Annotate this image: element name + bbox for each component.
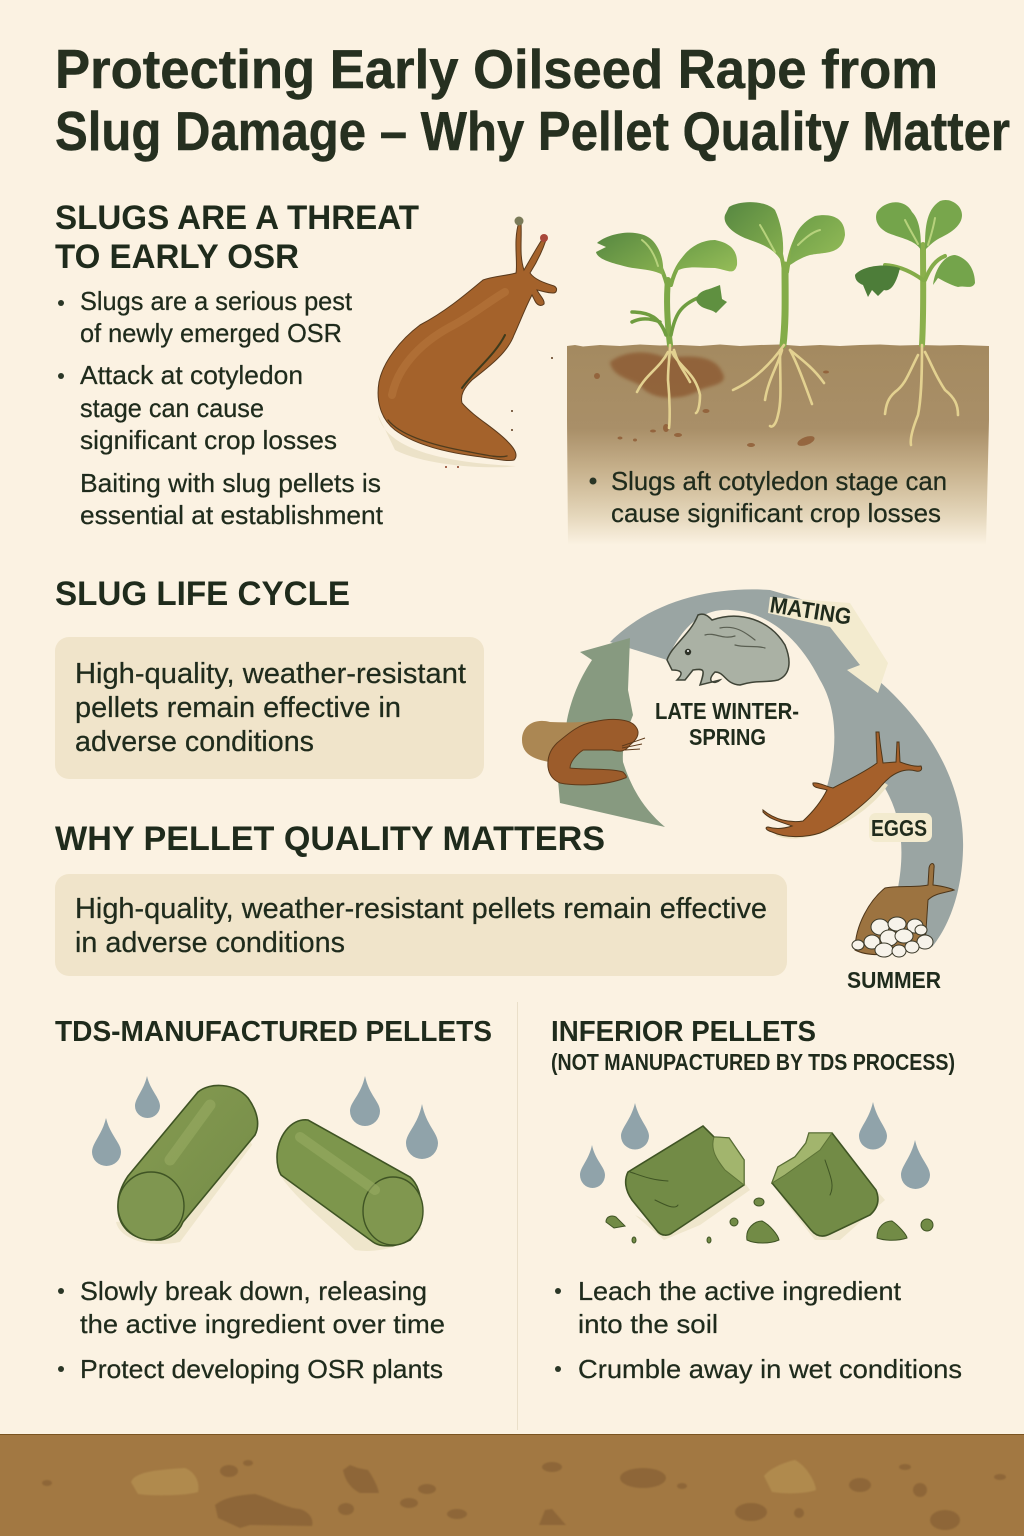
panel: slug life cycle bbox=[55, 575, 963, 993]
label: eggs: EGGS bbox=[871, 815, 927, 841]
callout: life cycle note: High-quality, weather-resistant bbox=[75, 658, 466, 690]
callout: life cycle note bbox=[55, 637, 484, 779]
label: summer: SUMMER bbox=[847, 967, 941, 993]
label: mating: MATING bbox=[768, 591, 853, 630]
bullet list: TDS benefits: the active ingredient over time bbox=[80, 1309, 445, 1339]
arrow: cream mating arrow bbox=[768, 597, 888, 693]
label: late winter-spring: LATE WINTER- bbox=[655, 698, 799, 724]
soil band bbox=[0, 1434, 1024, 1536]
icon: intact pellets bbox=[116, 1085, 423, 1251]
damaged soil patch bbox=[610, 352, 724, 398]
heading: slugs are a threat: TO EARLY OSR bbox=[55, 238, 299, 276]
panel: inferior pellets bbox=[551, 1016, 962, 1384]
bullet list: inferior drawbacks: Crumble away in wet conditions bbox=[578, 1354, 962, 1384]
bullet list: TDS benefits: Protect developing OSR plants bbox=[80, 1354, 443, 1384]
heading: inferior pellets: INFERIOR PELLETS bbox=[551, 1016, 816, 1048]
bullet list: TDS benefits: Slowly break down, releasing bbox=[80, 1276, 427, 1306]
icon: crumbling pellets bbox=[606, 1126, 933, 1243]
arrow: grey cycle arc bbox=[610, 589, 963, 947]
text block: soil caption: Slugs aft cotyledon stage can bbox=[611, 466, 947, 496]
illustration: soil cross-section with seedlings bbox=[567, 200, 989, 545]
bullet list: threat points: essential at establishment bbox=[80, 500, 384, 530]
text block: soil caption bbox=[590, 466, 947, 528]
bullet list: threat points bbox=[58, 286, 384, 530]
heading: slug life cycle: SLUG LIFE CYCLE bbox=[55, 575, 350, 613]
seedling: plant 1 bbox=[596, 233, 737, 345]
bullet list: TDS benefits bbox=[58, 1276, 445, 1384]
icon: grey rodent-like slug bbox=[667, 614, 789, 685]
callout: pellet quality note: in adverse conditions bbox=[75, 927, 345, 959]
callout: pellet quality note bbox=[55, 874, 787, 976]
label: late winter-spring bbox=[655, 698, 799, 750]
soil block bbox=[567, 344, 989, 545]
icon: slug on soil clod bbox=[522, 719, 645, 785]
seedling: plant 3 bbox=[855, 200, 975, 345]
plant roots bbox=[637, 345, 958, 445]
soil clods bbox=[594, 370, 829, 448]
panel: slugs are a threat bbox=[55, 199, 989, 545]
callout: life cycle note: adverse conditions bbox=[75, 726, 314, 758]
arrow: green return arrow bbox=[558, 638, 665, 827]
callout: pellet quality note: High-quality, weather-resistant pellets remain effective bbox=[75, 893, 767, 925]
title bbox=[55, 38, 1010, 162]
bullet list: threat points: significant crop losses bbox=[80, 425, 337, 455]
bullet list: threat points: Attack at cotyledon bbox=[80, 360, 303, 390]
bullet list: inferior drawbacks: Leach the active ingredient bbox=[578, 1276, 902, 1306]
bullet list: threat points: Slugs are a serious pest bbox=[80, 286, 353, 316]
text block: soil caption: cause significant crop losses bbox=[611, 498, 941, 528]
icon: crawling slug bbox=[763, 732, 922, 839]
panel: TDS-manufactured pellets bbox=[55, 1016, 492, 1384]
heading: TDS pellets: TDS-MANUFACTURED PELLETS bbox=[55, 1016, 492, 1048]
icon: rain drops bbox=[580, 1102, 930, 1189]
heading: inferior pellets bbox=[551, 1016, 955, 1075]
bullet list: threat points: Baiting with slug pellets is bbox=[80, 468, 381, 498]
heading: slugs are a threat bbox=[55, 199, 419, 276]
diagram: life cycle bbox=[522, 589, 963, 993]
title: Protecting Early Oilseed Rape from bbox=[55, 38, 938, 100]
panel: why pellet quality matters bbox=[55, 820, 787, 976]
heading: inferior pellets: (NOT MANUPACTURED BY TDS PROCESS) bbox=[551, 1049, 955, 1075]
pellet crumbs bbox=[606, 1198, 933, 1243]
icon: rain drops bbox=[92, 1076, 438, 1166]
illustration: large slug bbox=[378, 216, 557, 468]
callout: life cycle note: pellets remain effective in bbox=[75, 692, 401, 724]
bullet list: threat points: of newly emerged OSR bbox=[80, 318, 342, 348]
icon: slug with eggs bbox=[852, 864, 954, 957]
bullet list: inferior drawbacks: into the soil bbox=[578, 1309, 718, 1339]
heading: why pellet quality matters: WHY PELLET QUALITY MATTERS bbox=[55, 820, 605, 858]
seedling: plant 2 bbox=[725, 202, 845, 345]
heading: slugs are a threat: SLUGS ARE A THREAT bbox=[55, 199, 419, 237]
bullet list: threat points: stage can cause bbox=[80, 393, 264, 423]
bullet list: inferior drawbacks bbox=[555, 1276, 962, 1384]
label: late winter-spring: SPRING bbox=[689, 724, 766, 750]
